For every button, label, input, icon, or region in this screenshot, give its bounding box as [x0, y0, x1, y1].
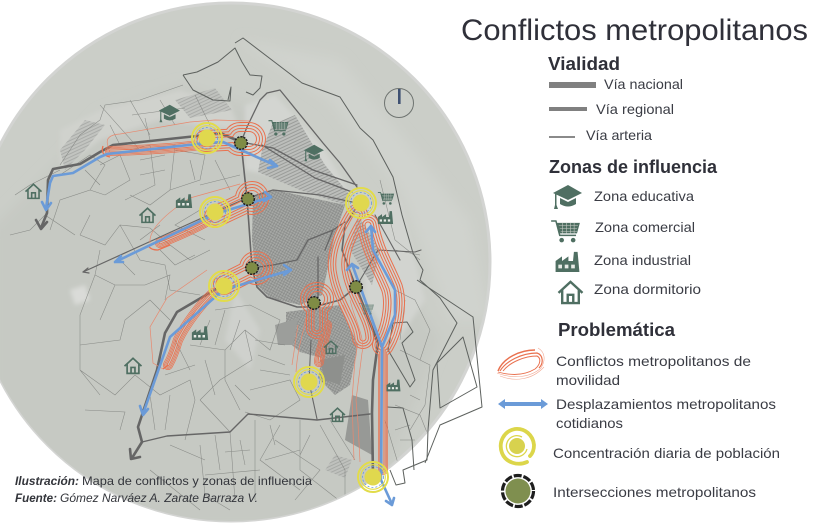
map credits: [15, 474, 312, 505]
population concentration points: [192, 123, 388, 492]
thin arterial arrowhead: [83, 268, 89, 273]
soft land tones: [0, 376, 366, 521]
legend: Problemática: [497, 320, 780, 506]
national road south-west with arrow: [130, 285, 223, 459]
legend: Vialidad: [548, 54, 683, 143]
map credits: Gómez Narváez A. Zarate Barraza V.: [60, 491, 258, 505]
road network: [83, 90, 421, 477]
legend: Problemática: Desplazamientos metropolitanos: [556, 396, 776, 412]
legend: Vialidad: Vía regional: [596, 101, 674, 117]
legend: Zonas de influencia: Zona educativa: [594, 188, 694, 204]
river loops: [387, 322, 477, 470]
legend: Problemática: Intersecciones metropolitanos: [553, 484, 756, 500]
legend: Problemática: Problemática: [558, 320, 676, 340]
icon: double arrow: [498, 399, 548, 409]
intersections on map: [235, 137, 362, 309]
parcels: [10, 85, 240, 235]
northern shoreline outline: [183, 38, 457, 485]
eastern outer boundary: [417, 280, 482, 463]
map credits: Fuente:: [15, 491, 57, 505]
map credits: Mapa de conflictos y zonas de influencia: [82, 474, 312, 488]
icon: intersection: [502, 476, 534, 506]
legend: Zonas de influencia: Zona dormitorio: [594, 281, 701, 297]
legend: Problemática: Conflictos metropolitanos de: [556, 353, 751, 369]
legend: Zonas de influencia: Zonas de influencia: [549, 157, 718, 177]
legend: Zonas de influencia: [549, 157, 718, 303]
north compass: [384, 88, 414, 118]
blue commute arrows: [42, 142, 395, 505]
map: metropolitan circle: [0, 3, 490, 530]
legend: Zonas de influencia: Zona industrial: [594, 252, 691, 268]
legend: Vialidad: Vía nacional: [604, 76, 683, 92]
legend: Problemática: Concentración diaria de población: [553, 445, 780, 461]
legend: Vialidad: Vía arteria: [586, 127, 652, 143]
dense coastal parcels: [60, 88, 352, 478]
legend: Zonas de influencia: Zona comercial: [595, 219, 695, 235]
national road west with arrow: [36, 133, 241, 229]
legend: Problemática: movilidad: [556, 372, 620, 388]
map icons: zones: [26, 105, 400, 421]
legend: Problemática: cotidianos: [556, 415, 623, 431]
title: Conflictos metropolitanos: [461, 14, 808, 47]
legend: Vialidad: Vialidad: [548, 54, 620, 74]
map credits: Ilustración:: [15, 474, 79, 488]
conflict rings: metropolitan mobility conflicts: [102, 120, 405, 475]
icon: conflict rings: [497, 348, 544, 379]
city blocks: [258, 115, 350, 205]
icon: population spiral: [501, 429, 534, 464]
